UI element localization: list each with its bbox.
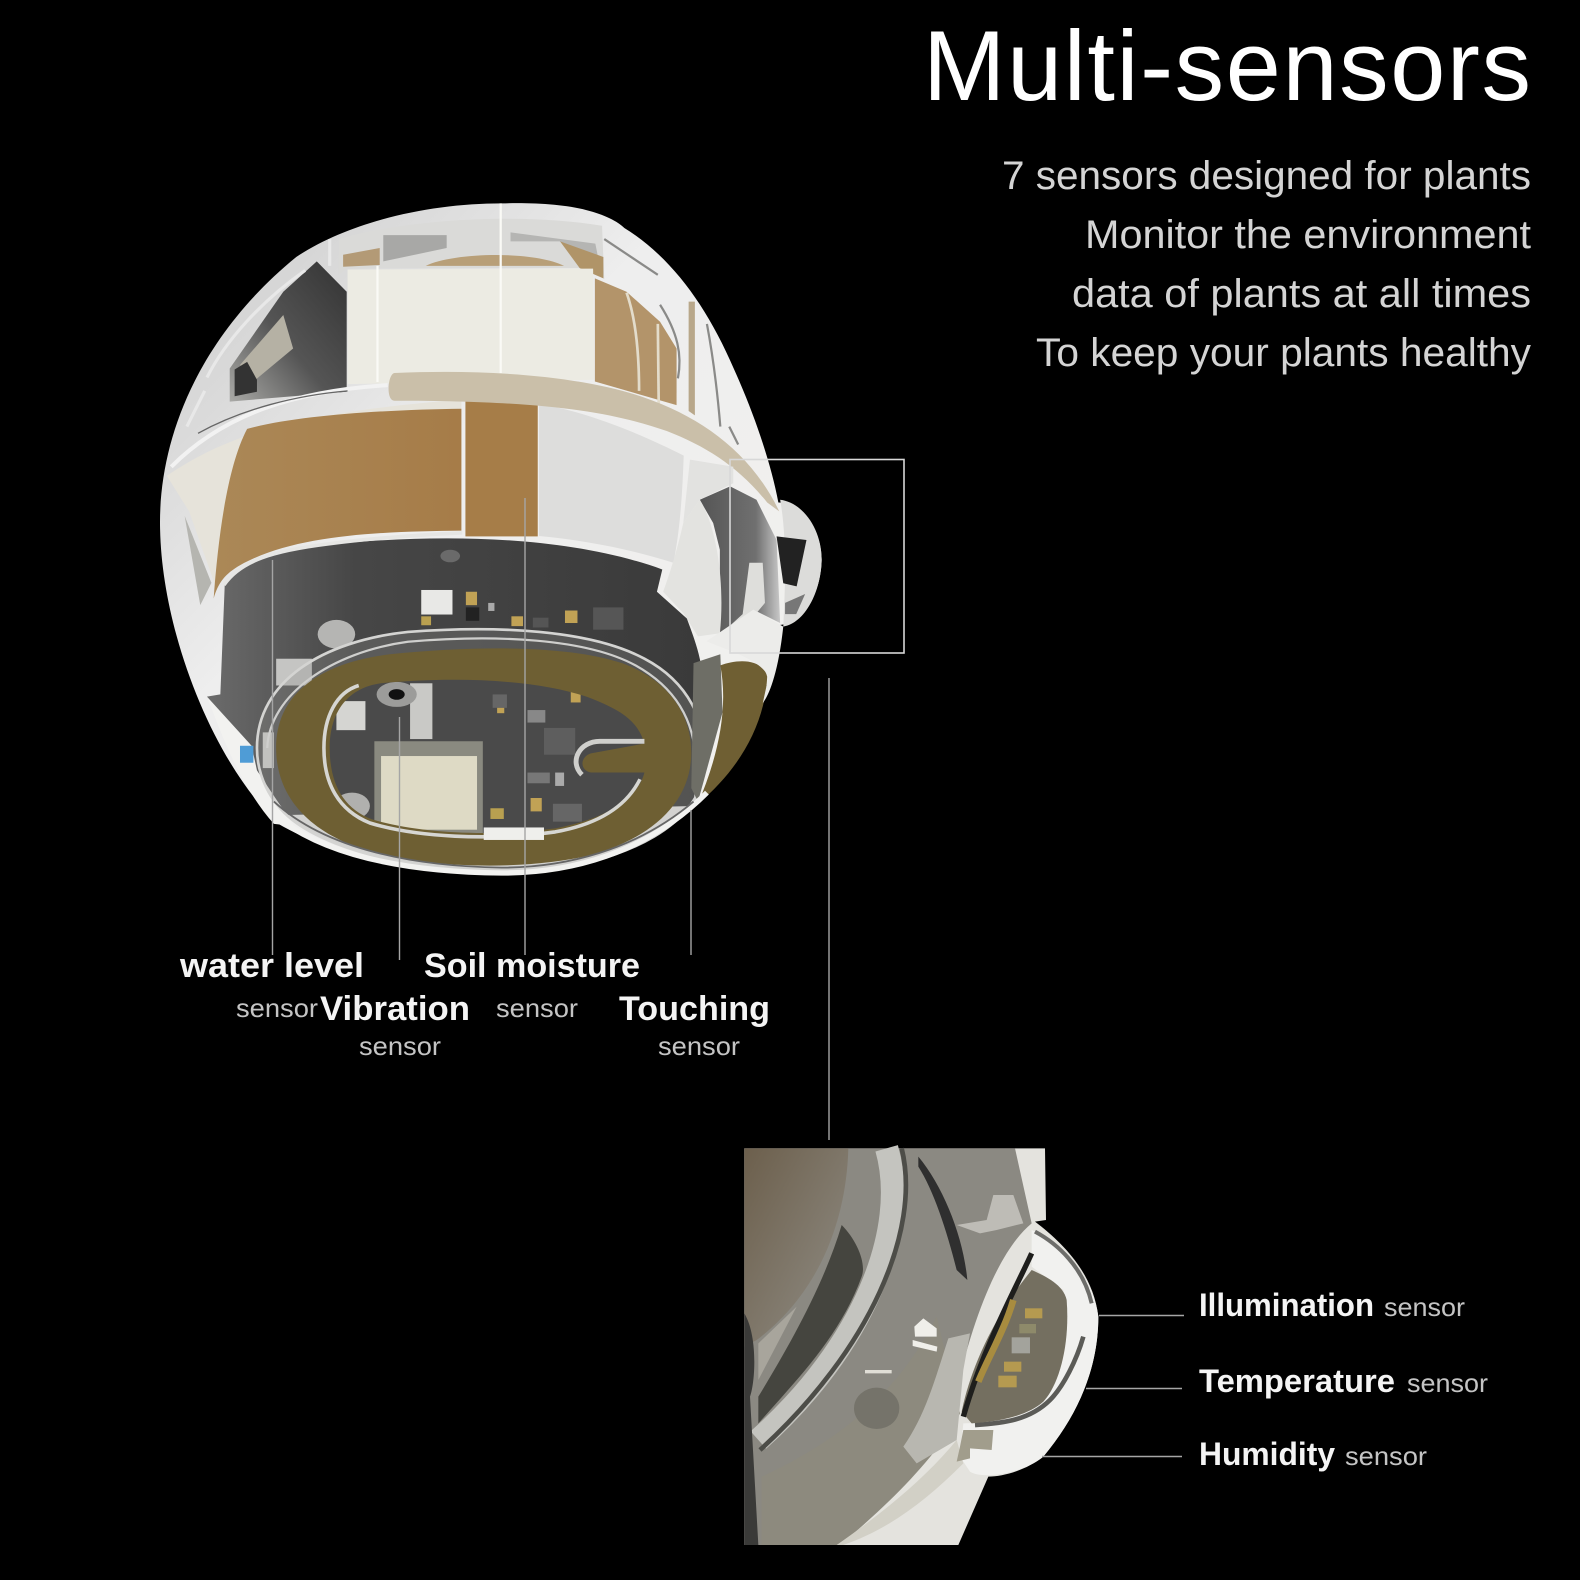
inset pale texture — [758, 1307, 797, 1380]
main device cutaway illustration — [160, 203, 822, 875]
inset brown lower floor — [762, 1317, 960, 1545]
inset lower right glass strip — [903, 1333, 970, 1463]
label: illumination sensor: Illumination — [1199, 1287, 1374, 1323]
label: soil moisture sensor: sensor — [496, 993, 578, 1023]
leader line: touching — [690, 810, 692, 955]
plate printed text strip — [978, 1300, 1013, 1382]
far right gold strip — [689, 302, 695, 415]
label: soil moisture sensor — [424, 947, 640, 1023]
inset light lower arc — [837, 1440, 963, 1545]
leader line: vibration — [398, 717, 400, 960]
label: soil moisture sensor: Soil moisture — [424, 947, 640, 985]
gold band centre — [465, 399, 538, 536]
plate sensor chips — [998, 1308, 1042, 1387]
left side rim band — [167, 400, 461, 587]
white panel — [539, 404, 684, 563]
lower left shell white — [207, 697, 294, 826]
upper PCB components — [276, 550, 623, 686]
dark PCB — [207, 538, 702, 815]
blue connector — [240, 746, 253, 763]
leader line: soil moisture — [524, 498, 526, 955]
label: water level sensor — [179, 947, 364, 1023]
right interior — [700, 486, 780, 633]
bump lower dark detail — [785, 594, 805, 614]
label: temperature sensor — [1199, 1363, 1488, 1399]
subtitle text block: 7 sensors designed for plants — [1002, 154, 1531, 198]
inset upper components — [957, 1195, 1023, 1233]
inner ring highlight — [324, 686, 640, 837]
cap gold patch right — [560, 241, 603, 278]
inset white component — [913, 1318, 937, 1352]
label: vibration sensor: Vibration — [320, 990, 470, 1028]
inset dark wedge — [758, 1225, 863, 1423]
bump sensor chip — [777, 536, 806, 586]
translucent lens ring — [257, 629, 705, 872]
transparent shell body — [160, 203, 822, 875]
label: illumination sensor — [1199, 1287, 1465, 1323]
cap gold patch centre — [426, 255, 564, 266]
inset post bracket — [865, 1367, 892, 1377]
PCB inside ring — [319, 673, 651, 842]
cap grey inset right — [511, 232, 600, 266]
label: vibration sensor — [320, 990, 470, 1061]
cap grey inset — [383, 235, 447, 261]
left lower interior — [185, 516, 211, 605]
label: humidity sensor: sensor — [1345, 1441, 1427, 1471]
inset black left strip — [744, 1313, 758, 1545]
bump base clip — [957, 1430, 993, 1462]
lens ring inner highlights — [267, 638, 696, 766]
label: humidity sensor: Humidity — [1199, 1436, 1335, 1472]
olive sealing ring — [276, 648, 691, 866]
subtitle text block: data of plants at all times — [1072, 272, 1531, 316]
gold band left — [214, 409, 461, 598]
white connector — [716, 563, 765, 639]
subtitle text block — [1002, 154, 1531, 375]
white trim — [224, 533, 462, 585]
inset silhouette — [744, 1148, 1098, 1545]
label: temperature sensor: sensor — [1407, 1368, 1488, 1398]
cream module — [374, 741, 483, 844]
sensor bump cap — [780, 500, 822, 627]
label: illumination sensor: sensor — [1384, 1292, 1465, 1322]
label: touching sensor — [619, 990, 770, 1061]
title: Multi-sensors — [923, 10, 1531, 121]
upper right gold — [595, 278, 677, 405]
inset leader lines — [1042, 1316, 1184, 1456]
motor cylinder dark end — [235, 362, 257, 396]
grey streaks — [604, 239, 738, 444]
white connector by ring — [263, 732, 274, 768]
plate black edge — [963, 1253, 1032, 1417]
label: temperature sensor: Temperature — [1199, 1363, 1395, 1399]
label: touching sensor: Touching — [619, 990, 770, 1028]
inset grey interior — [744, 1148, 1032, 1545]
inset brown top left — [744, 1148, 848, 1347]
shell seam rim — [171, 385, 388, 467]
curved metal hook — [576, 741, 644, 775]
detail inset: sensor bump close-up — [744, 1148, 1098, 1545]
callout box around sensor bump — [730, 460, 904, 653]
left interior motor cylinder — [240, 315, 293, 382]
cap gold patch left — [343, 248, 380, 267]
top cap — [339, 219, 604, 279]
bottom rim dark line — [274, 802, 694, 868]
inset screw post — [854, 1388, 899, 1429]
inset outer lens arc — [758, 1148, 893, 1440]
bump dark reflections — [1035, 1232, 1092, 1303]
outer shell bottom rim — [283, 793, 707, 873]
top mounting plate — [683, 460, 733, 523]
pale streaks over gold — [627, 293, 659, 404]
white tab — [484, 827, 544, 840]
leader line: to detail inset — [828, 678, 830, 1140]
label: humidity sensor — [1199, 1436, 1427, 1472]
subtitle text block: Monitor the environment — [1085, 213, 1531, 257]
lower right shell strip — [706, 610, 783, 703]
label: water level sensor: water level — [179, 947, 364, 985]
bump outer glass — [960, 1230, 1098, 1475]
bump inner sensor plate — [962, 1270, 1067, 1423]
label: touching sensor: sensor — [658, 1031, 740, 1061]
upper left interior — [230, 261, 347, 402]
label: vibration sensor: sensor — [359, 1031, 441, 1061]
inset black strap — [918, 1157, 967, 1280]
left shell highlights — [187, 239, 330, 427]
subtitle text block: To keep your plants healthy — [1036, 331, 1531, 375]
ring PCB components — [334, 682, 582, 822]
right olive shoulder — [698, 661, 767, 804]
label: water level sensor: sensor — [236, 993, 318, 1023]
right side component strip — [691, 654, 723, 802]
speaker disc — [663, 500, 721, 636]
white battery block — [348, 269, 594, 384]
beige band — [389, 372, 779, 511]
leader line: water level — [272, 560, 274, 955]
